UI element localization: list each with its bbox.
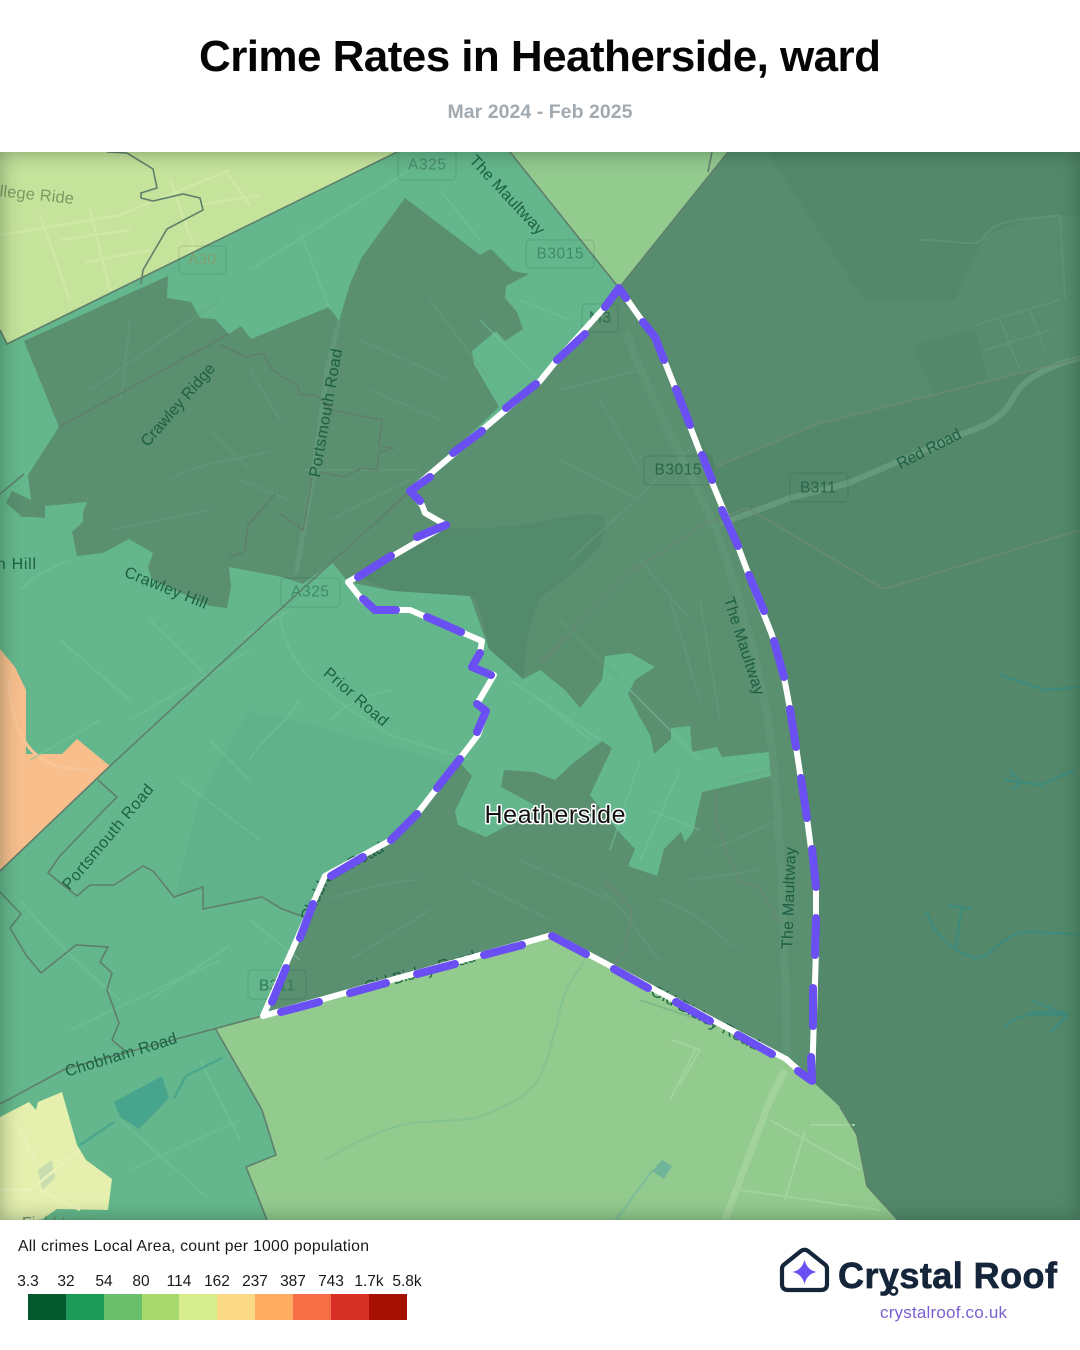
road shield: B3015 ward: B3015 [654, 462, 702, 478]
legend scale labels: 32 [57, 1273, 75, 1290]
wordmark key detail [890, 1287, 897, 1295]
road label: Portsmouth Road north: Portsmouth Road [307, 348, 346, 479]
legend scale labels [17, 1273, 422, 1290]
area: Heatherside medium green patch [348, 582, 771, 876]
area: woodland north-east [767, 152, 1080, 425]
road network: streets on dark areas [198, 300, 770, 1028]
area: ward interior dark green [263, 288, 816, 1082]
area: pale yellow south-west [0, 1092, 112, 1220]
road label: The Maultway north: The Maultway [466, 152, 548, 238]
legend scale labels: 5.8k [392, 1273, 422, 1290]
legend colour ramp [28, 1294, 407, 1320]
road label: Crawley Ridge: Crawley Ridge [138, 360, 219, 450]
pond south [652, 1160, 672, 1179]
road: B311 and Red Road [720, 358, 1080, 524]
road network: faint streets on light areas [20, 170, 700, 1200]
map edge vignette [0, 152, 1080, 1220]
road shield: A325 top [398, 151, 456, 180]
road: south side streets [670, 1040, 880, 1210]
logo: Crystal Roof [782, 1250, 1058, 1322]
legend scale labels: 743 [318, 1273, 344, 1290]
area: yellow-green north-west [0, 152, 397, 344]
road shield: B3015 ward [644, 456, 712, 485]
road: Portsmouth Road carriageway [296, 321, 339, 574]
wordmark: Crystal Roof [838, 1255, 1058, 1296]
road label: Red Road: Red Road [894, 426, 964, 473]
title: Crime Rates in Heatherside, ward [199, 32, 881, 81]
road shield: B311 south: B311 [259, 978, 295, 994]
park: pale yellow area [38, 1160, 55, 1190]
road label: Prior Road: Prior Road [320, 665, 391, 730]
road label: Field Lane: Field Lane [22, 1215, 97, 1232]
legend scale labels: 1.7k [354, 1273, 384, 1290]
icon: house with star [782, 1250, 827, 1290]
muted boundaries in east and ward [540, 358, 1080, 965]
legend [17, 1238, 422, 1320]
road shield: A325 west [281, 578, 340, 607]
road shield: M3 [582, 304, 618, 332]
legend scale labels: 387 [280, 1273, 306, 1290]
road label: Chobham Road ward: Chobham Road [301, 842, 384, 918]
road shield: M3: M3 [589, 310, 611, 326]
road shield: A30 [179, 246, 226, 274]
legend title: All crimes Local Area, count per 1000 population [18, 1238, 369, 1255]
subtitle: date range: Mar 2024 - Feb 2025 [448, 101, 633, 123]
area: dark green north-west cluster [6, 198, 529, 608]
area: darker woodland inside ward [358, 514, 605, 679]
road label: Crawley Hill: Crawley Hill [122, 564, 210, 613]
legend scale labels: 3.3 [17, 1273, 39, 1290]
road label: Old Bisley Road east: Old Bisley Road [648, 983, 762, 1054]
legend scale labels: 162 [204, 1273, 230, 1290]
road shield: B3015 north: B3015 [536, 246, 584, 262]
ward name label: Heatherside [484, 801, 626, 829]
street: pale yellow area [0, 1120, 80, 1210]
legend scale labels: 114 [167, 1273, 192, 1290]
map base: medium green areas [0, 152, 840, 1220]
road shield: A325 west: A325 [291, 584, 329, 600]
area: orange west [0, 649, 110, 871]
road label: Chobham Road west: Chobham Road [63, 1030, 179, 1081]
legend scale labels: 54 [95, 1273, 113, 1290]
road shield: A325 top: A325 [408, 156, 446, 174]
road shield: A30: A30 [188, 252, 216, 268]
pond [114, 1076, 169, 1129]
area: east dark green [694, 361, 1080, 1220]
road label: Old Bisley Road west: Old Bisley Road [363, 948, 478, 997]
streets: north-east estate [920, 214, 1061, 244]
road shield: B311 east: B311 [800, 480, 836, 496]
road shield: B3015 north [526, 240, 594, 268]
streets: north-west estate [0, 170, 260, 300]
area: light green south [215, 935, 898, 1220]
ward boundary: Heatherside [263, 288, 816, 1082]
road label: Portsmouth Road south: Portsmouth Road [59, 781, 157, 893]
website: crystalroof.co.uk [880, 1303, 1008, 1322]
street: orange area [8, 680, 90, 770]
rivers and water features [80, 675, 1080, 1220]
area: light green wedge north [510, 152, 728, 288]
legend scale labels: 237 [242, 1273, 268, 1290]
road: A road through south light area [725, 1070, 785, 1220]
road shield: B311 east [790, 473, 848, 502]
road: M3 corridor [768, 752, 771, 776]
road shield: B311 south [248, 970, 306, 999]
area: slightly darker green west of ward [174, 711, 461, 918]
road label: The Maultway south: The Maultway [779, 847, 800, 949]
legend scale labels: 80 [132, 1273, 150, 1290]
road label: The Maultway middle: The Maultway [720, 595, 767, 697]
area: lighter green north-east fields [619, 152, 1080, 467]
district boundary lines [0, 152, 898, 1220]
